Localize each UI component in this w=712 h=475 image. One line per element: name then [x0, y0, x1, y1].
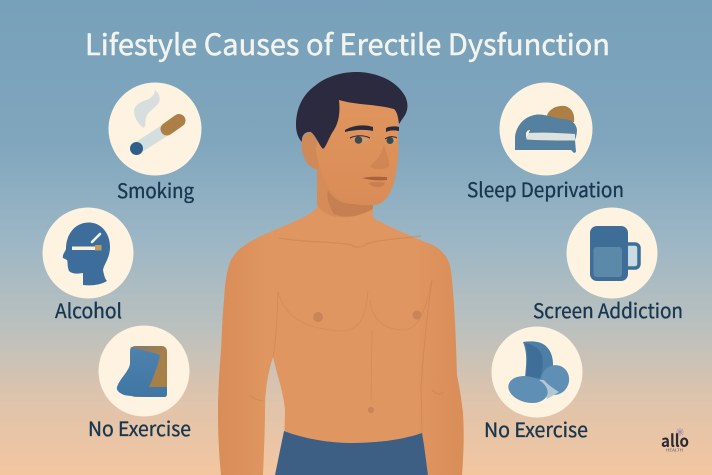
- icon: cigarette: [130, 120, 179, 155]
- lips: [362, 177, 387, 180]
- icon: blue cushion: [117, 347, 167, 397]
- chest lines: [278, 280, 432, 402]
- icon: white sheet: [526, 133, 575, 140]
- icon: blue bed: [515, 114, 577, 153]
- circle: [108, 82, 202, 176]
- arm creases: [250, 280, 444, 433]
- nipples and navel: [313, 310, 422, 413]
- circle: [492, 326, 582, 418]
- icon: mug fill: [594, 247, 622, 277]
- torso and arms: [218, 190, 464, 475]
- icon: mug body: [590, 226, 628, 281]
- man figure: [218, 72, 464, 475]
- panel: smoking: [108, 82, 202, 204]
- eyebrows: [345, 125, 399, 132]
- ear: [301, 132, 322, 170]
- hair: [296, 72, 407, 149]
- icon: left oval: [505, 372, 551, 407]
- logo subtext: HEALTH: [666, 448, 684, 454]
- collarbones: [279, 236, 421, 247]
- neck: [317, 165, 373, 217]
- circle: [566, 208, 658, 298]
- logo star: [676, 428, 684, 436]
- icon: gap under blanket: [526, 130, 530, 139]
- circle: [42, 208, 134, 298]
- title: Lifestyle Causes of Erectile Dysfunction: [85, 22, 610, 64]
- face: [316, 98, 400, 205]
- icon: upper shape: [523, 341, 553, 380]
- circle: [98, 326, 190, 416]
- circle: [500, 82, 592, 176]
- icon: shading: [525, 343, 543, 378]
- label: No Exercise: [88, 413, 191, 442]
- panel: no exercise left: [88, 326, 191, 442]
- logo text: allo: [661, 427, 689, 452]
- shorts: [275, 431, 428, 475]
- neck shadow: [327, 190, 373, 217]
- eyes: [350, 136, 397, 144]
- nose: [370, 145, 389, 169]
- panel: alcohol: [42, 208, 134, 324]
- label: Screen Addiction: [533, 295, 683, 324]
- panel: no exercise right: [484, 326, 588, 443]
- icon: tan head: [547, 106, 574, 122]
- panel: sleep deprivation: [467, 82, 624, 203]
- icon: cigarette: [72, 234, 102, 250]
- icon: right oval: [537, 361, 573, 399]
- panel: screen addiction: [533, 208, 683, 324]
- label: No Exercise: [484, 414, 588, 443]
- icon: light strip: [536, 380, 559, 399]
- icon: smoke: [134, 90, 160, 128]
- icon: head: [63, 222, 110, 285]
- icon: mug handle: [624, 244, 639, 268]
- label: Sleep Deprivation: [467, 174, 624, 203]
- icon: tan backing: [130, 346, 167, 397]
- logo: [661, 427, 689, 454]
- label: Alcohol: [55, 295, 122, 324]
- label: Smoking: [117, 175, 194, 204]
